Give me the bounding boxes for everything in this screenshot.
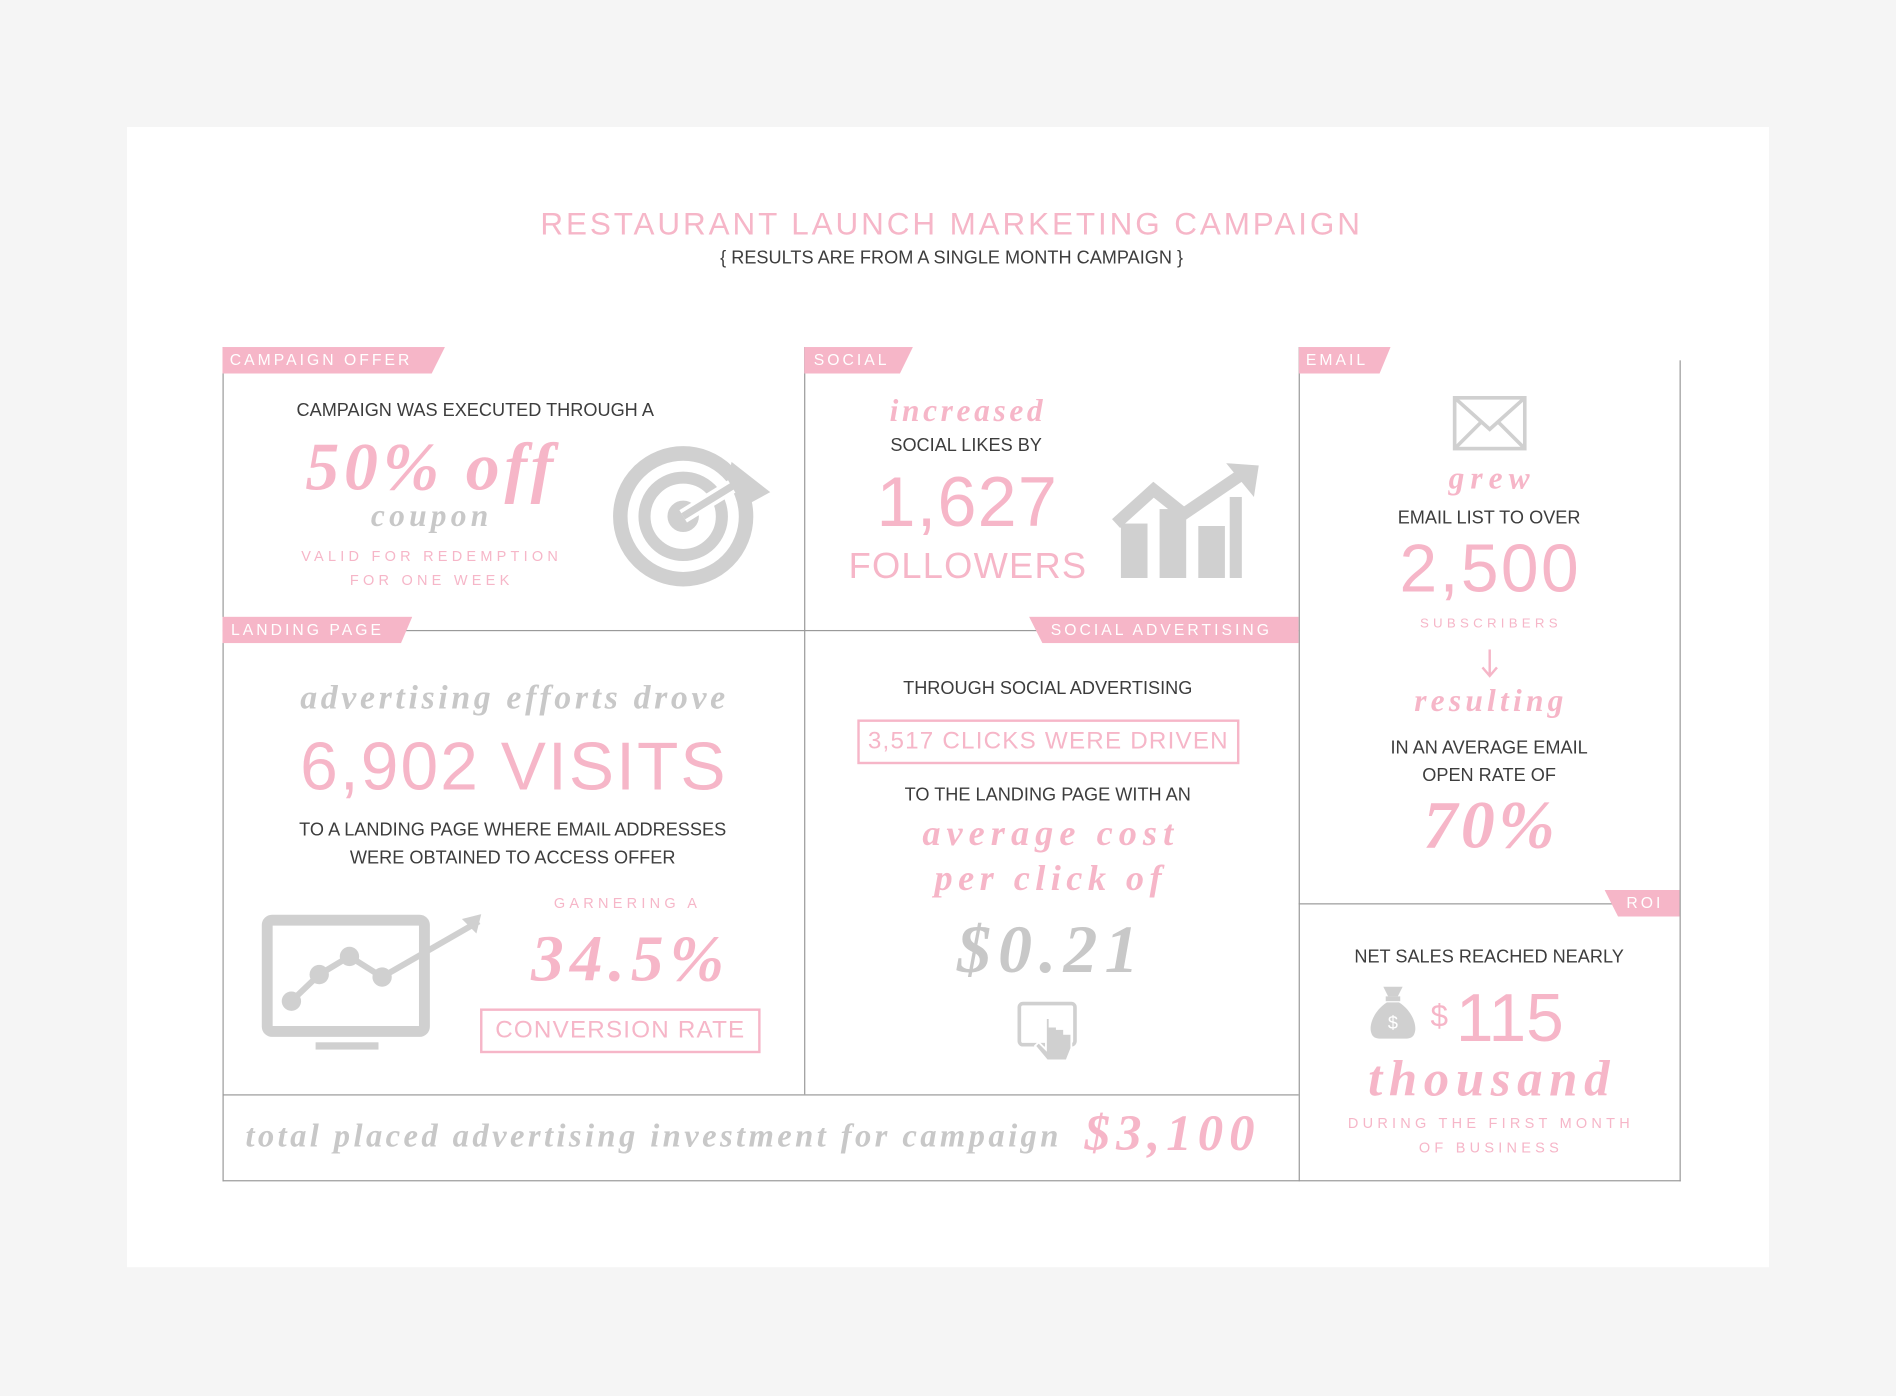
- tag: roi: [1605, 890, 1680, 917]
- text: average cost per click: average cost: [922, 814, 1179, 854]
- tag: campaign offer: CAMPAIGN OFFER: [230, 351, 412, 369]
- text: valid for redemption: VALID FOR REDEMPTION: [301, 548, 562, 565]
- panel: email: EMAIL LIST TO OVER: [1398, 508, 1580, 528]
- icon: bar chart with arrow: [1112, 463, 1259, 578]
- panel: campaign offer: FOR ONE WEEK: [350, 572, 514, 589]
- panel: social: SOCIAL LIKES BY: [890, 435, 1042, 456]
- text: grew: grew: [1449, 461, 1536, 496]
- box: conversion rate: [480, 1008, 761, 1053]
- box: conversion rate: CONVERSION RATE: [495, 1017, 745, 1044]
- stat: 2,500: 2,500: [1400, 530, 1581, 606]
- tag: social advertising: SOCIAL ADVERTISING: [1051, 620, 1272, 638]
- tag: email: [1299, 347, 1391, 374]
- icon: target: [613, 446, 770, 586]
- icon: monitor chart: [262, 914, 482, 1050]
- panel: email: OPEN RATE OF: [1422, 765, 1556, 786]
- icon: money bag: [1370, 986, 1416, 1039]
- panel: landing page: WERE OBTAINED TO ACCESS OFFER: [350, 848, 675, 868]
- stat: 1,627 followers: 1,627: [877, 463, 1058, 542]
- panel: social advertising: TO THE LANDING PAGE WITH AN: [905, 785, 1191, 805]
- box: clicks driven: [857, 719, 1239, 764]
- tag: email: EMAIL: [1306, 351, 1368, 369]
- tag: roi: ROI: [1626, 894, 1663, 912]
- stat: 70%: 70%: [1423, 788, 1558, 863]
- tag: social: SOCIAL: [814, 351, 890, 369]
- panel: social: [804, 347, 1259, 586]
- card background: [127, 127, 1769, 1267]
- tag: landing page: LANDING PAGE: [231, 620, 384, 638]
- arrow: down: [1482, 650, 1498, 678]
- tag: landing page: [222, 617, 412, 643]
- icon: envelope: [1452, 396, 1526, 450]
- panel: roi: NET SALES REACHED NEARLY: [1354, 947, 1624, 967]
- panel: social: FOLLOWERS: [849, 547, 1087, 586]
- stat: 34.5%: 34.5%: [531, 923, 730, 995]
- panel: roi: OF BUSINESS: [1419, 1139, 1563, 1156]
- icon: hand click: [1018, 1002, 1077, 1060]
- panel: campaign offer: [222, 347, 770, 589]
- text: increased: increased: [890, 393, 1046, 428]
- panel: social advertising: per click of: [935, 859, 1167, 898]
- panel: email: SUBSCRIBERS: [1420, 617, 1562, 631]
- text: thousand: thousand: [1368, 1052, 1616, 1108]
- panel: total investment: total placed advertising investment for campaign: [245, 1117, 1062, 1154]
- panel: total investment: [245, 1106, 1261, 1162]
- stat: 50% off: 50% off: [305, 430, 558, 505]
- panel: social advertising: THROUGH SOCIAL ADVERTISING: [903, 678, 1192, 699]
- icon: money bag: $: [1388, 1013, 1398, 1033]
- subtitle: { RESULTS ARE FROM A SINGLE MONTH CAMPAIGN }: [720, 248, 1183, 268]
- text: advertising efforts drove: advertising efforts drove: [300, 680, 729, 717]
- text: garnering a: GARNERING A: [554, 895, 701, 912]
- panel: roi: 115: [1456, 979, 1564, 1056]
- panel: landing page: [222, 616, 761, 1054]
- panel: landing page: TO A LANDING PAGE WHERE EMAIL ADDRESSES: [299, 820, 726, 840]
- panel: roi: [1348, 890, 1680, 1156]
- tag: campaign offer: [222, 347, 445, 374]
- box: clicks driven: 3,517 CLICKS WERE DRIVEN: [868, 728, 1229, 755]
- stat: $115: $: [1430, 998, 1448, 1034]
- stat: $3,100: $3,100: [1085, 1106, 1261, 1162]
- panel: social advertising: [857, 616, 1298, 1060]
- text: coupon: coupon: [371, 498, 492, 533]
- panel: roi: DURING THE FIRST MONTH: [1348, 1115, 1634, 1132]
- panel: email: IN AN AVERAGE EMAIL: [1390, 738, 1588, 758]
- panel: email: [1298, 347, 1588, 863]
- tag: social advertising: [1029, 617, 1299, 643]
- tag: social: [804, 347, 913, 374]
- title: RESTAURANT LAUNCH MARKETING CAMPAIGN: [540, 206, 1363, 242]
- text: resulting: resulting: [1414, 683, 1568, 718]
- text: executed through: CAMPAIGN WAS EXECUTED THROUGH A: [296, 400, 654, 421]
- stat: 6,902 visits: 6,902 VISITS: [300, 728, 728, 804]
- stat: $0.21: $0.21: [957, 913, 1146, 988]
